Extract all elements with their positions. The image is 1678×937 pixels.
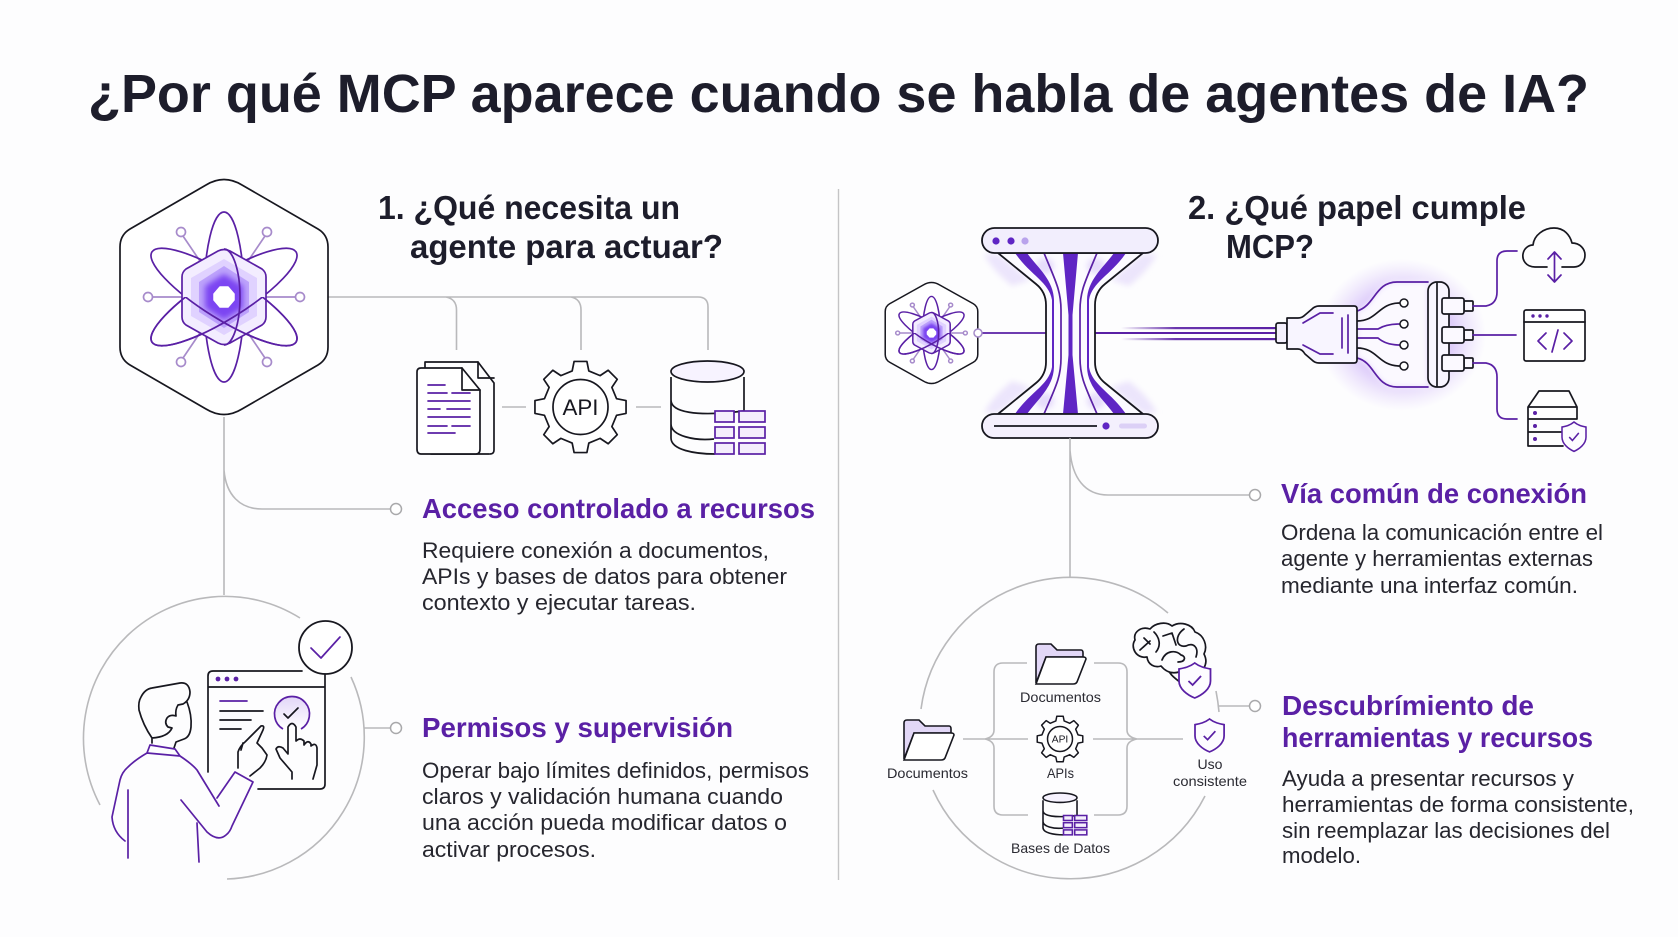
text block: permissions: Permisos y supervisión <box>422 712 733 743</box>
glow core: wire bay <box>1357 282 1428 387</box>
icon: cloud <box>1523 228 1585 282</box>
label: consistent use <box>1173 756 1247 789</box>
illustration: person <box>112 683 253 862</box>
glow: connector <box>1318 259 1486 411</box>
text block: controlled access: Acceso controlado a recursos <box>422 493 815 524</box>
label: consistent use: consistente <box>1173 773 1247 789</box>
connector: agent to resources <box>224 297 708 595</box>
marker: common path <box>1250 490 1260 500</box>
marker: agent port <box>974 329 982 337</box>
text block: discovery: Descubrímiento de <box>1282 690 1534 721</box>
text block: discovery: herramientas de forma consistente, <box>1282 792 1634 817</box>
ring: human supervision <box>83 596 390 879</box>
icon: documents <box>417 362 494 454</box>
text block: controlled access: Requiere conexión a documentos, <box>422 538 769 563</box>
text block: discovery <box>1282 690 1634 868</box>
icon: MCP hourglass <box>982 228 1158 438</box>
label: documents left: Documentos <box>887 765 968 781</box>
connectors: resource bracket <box>963 663 1183 815</box>
icon: consistent shield <box>1195 719 1224 752</box>
text block: permissions <box>422 712 809 862</box>
marker: discovery <box>1250 700 1260 712</box>
text block: controlled access: APIs y bases de datos para obtener <box>422 564 788 589</box>
connector: hub branch <box>1070 438 1250 577</box>
icon: database <box>671 361 765 454</box>
label: documents top: Documentos <box>1020 689 1101 705</box>
panel: left column <box>83 180 815 879</box>
icon: API gear: API <box>562 395 598 420</box>
icon: brain with shield <box>1133 623 1210 698</box>
heading: section 1: 1. ¿Qué necesita un <box>378 189 680 226</box>
text block: permissions: Operar bajo límites definidos, permisos <box>422 758 809 783</box>
icon: small database <box>1043 793 1087 835</box>
text block: discovery: Ayuda a presentar recursos y <box>1282 766 1575 791</box>
icon: small gear <box>1037 716 1083 762</box>
icon: folder left <box>904 720 954 760</box>
label: databases: Bases de Datos <box>1011 840 1110 856</box>
text block: discovery: sin reemplazar las decisiones del <box>1282 818 1610 843</box>
text block: discovery: herramientas y recursos <box>1282 722 1593 753</box>
heading: section 1: agente para actuar? <box>410 228 723 265</box>
connectors: tools <box>1473 251 1517 419</box>
text block: common path <box>1281 478 1603 598</box>
marker: resources <box>390 504 402 514</box>
text block: permissions: activar procesos. <box>422 837 596 862</box>
icon: secure server <box>1528 391 1586 451</box>
ring: discovery <box>921 577 1250 879</box>
heading: section 1 <box>378 189 723 265</box>
data lines: MCP to connector <box>978 327 1277 340</box>
text block: common path: Vía común de conexión <box>1281 478 1587 509</box>
text block: common path: mediante una interfaz común. <box>1281 573 1578 598</box>
icon: agent hexagon <box>120 180 328 414</box>
label: consistent use: Uso <box>1198 756 1223 772</box>
icon: code window <box>1524 310 1585 361</box>
icon: check badge <box>299 621 352 674</box>
icon: small gear: API <box>1052 734 1068 746</box>
marker: permissions <box>390 722 402 734</box>
illustration: approval window <box>208 671 325 789</box>
illustration: hands <box>238 724 317 779</box>
label: apis: APIs <box>1047 765 1074 781</box>
text block: discovery: modelo. <box>1282 843 1361 868</box>
text block: common path: agente y herramientas externas <box>1281 546 1593 571</box>
text block: controlled access: contexto y ejecutar tareas. <box>422 590 696 615</box>
panel: right column <box>885 189 1634 879</box>
heading: section 2 <box>1188 189 1526 265</box>
icon: API gear <box>535 361 626 453</box>
text block: controlled access <box>422 493 815 615</box>
icon: connector hub <box>1276 282 1473 387</box>
text block: permissions: una acción pueda modificar datos o <box>422 810 787 835</box>
icon: folder top <box>1036 644 1086 684</box>
text block: permissions: claros y validación humana cuando <box>422 784 783 809</box>
text block: common path: Ordena la comunicación entre el <box>1281 520 1603 545</box>
title: ¿Por qué MCP aparece cuando se habla de agentes de IA? <box>88 64 1589 124</box>
icon: small agent hexagon <box>885 282 978 384</box>
heading: section 2: 2. ¿Qué papel cumple <box>1188 189 1526 226</box>
heading: section 2: MCP? <box>1226 228 1314 265</box>
